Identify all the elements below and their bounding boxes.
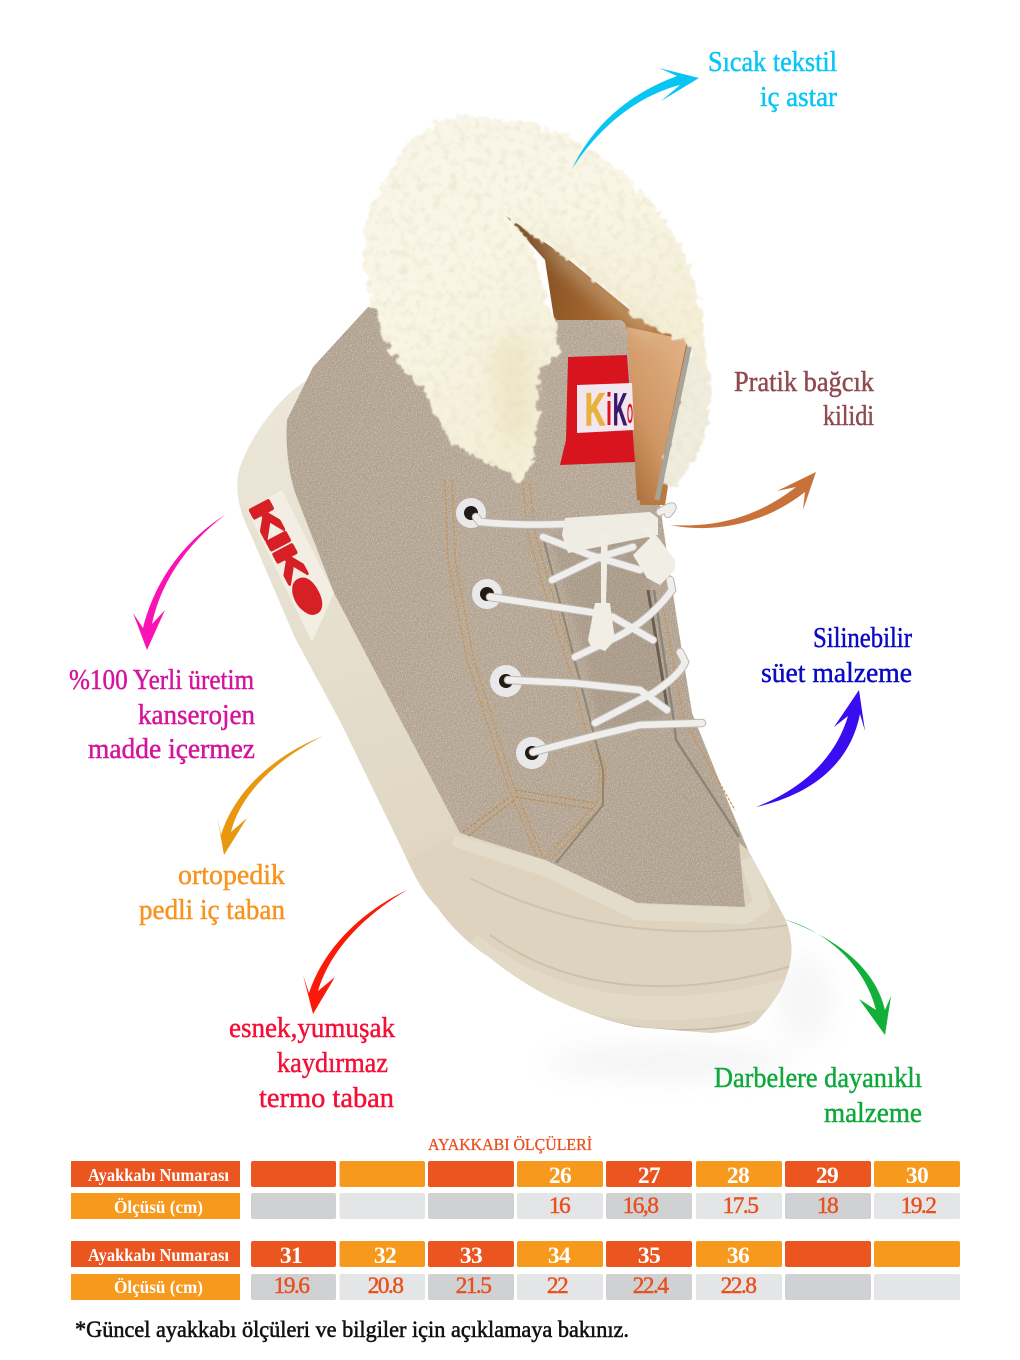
table size cells row 1: 30 [906,1163,928,1189]
table size cells row 2 [251,1241,960,1269]
inner tongue gusset shade [550,530,668,735]
table row labels [71,1161,240,1300]
bungee lace lock [562,512,658,553]
table measure cells row 1: 18 [817,1193,838,1219]
shoe illustration [237,115,795,1033]
rubber toe cap [408,835,791,1033]
table row labels: Ölçüsü (cm) [114,1197,203,1218]
callout: local production [69,515,255,765]
table measure cells row 1 [251,1193,960,1219]
label: warm lining [708,47,838,113]
table measure cells row 2: 21.5 [456,1273,491,1299]
label logo text: i [606,384,612,435]
callout: lace lock [670,367,874,528]
label: local production [69,665,255,765]
arrow: magenta [133,515,225,650]
table size cells row 2: 33 [460,1243,482,1269]
label: orthopedic insole [139,860,285,926]
label: flexible sole: kaydırmaz [277,1048,388,1079]
table measure cells row 1: 17.5 [723,1193,758,1219]
table measure cells row 2: 20.8 [368,1273,403,1299]
label: lace lock: Pratik bağcık [734,367,874,398]
table measure cells row 2 [251,1273,960,1300]
label: lace lock [734,367,874,432]
outsole [237,380,791,1033]
eyelets [456,498,548,769]
label: local production: madde içermez [88,734,255,765]
table size cells row 2: 35 [638,1243,660,1269]
table measure cells row 1: 19.2 [901,1193,936,1219]
table size cells row 1: 27 [638,1163,661,1189]
shoe reflection on floor [545,955,833,1078]
label: orthopedic insole: pedli iç taban [139,895,285,926]
label: orthopedic insole: ortopedik [178,860,285,891]
label: flexible sole [229,1013,395,1114]
laces [456,498,702,769]
peach lining [627,327,687,503]
table measure cells row 2: 19.6 [274,1273,310,1299]
red tongue label [560,355,635,465]
label: suede: Silinebilir [813,623,913,654]
size table [71,1161,960,1300]
label logo text: K [613,384,627,435]
table size cells row 1: 26 [549,1163,572,1189]
label: impact resistant: Darbelere dayanıklı [714,1063,922,1094]
arrow: blue [756,690,865,807]
table size cells row 2: 36 [727,1243,750,1269]
heel logo slab [247,490,334,642]
fur shading [490,215,660,445]
label: local production: kanserojen [138,700,255,731]
table measure cells row 2: 22 [547,1273,568,1299]
label: impact resistant [714,1063,922,1129]
size table title: AYAKKABI ÖLÇÜLERİ [428,1135,592,1154]
lace strands [476,506,702,752]
table size cells row 1 [251,1161,960,1189]
lace strand outlines [476,506,702,752]
label logo text: K [585,384,605,435]
table size cells row 1: 29 [816,1163,838,1189]
table size cells row 2: 32 [374,1243,396,1269]
boot cavity [505,215,692,505]
table measure cells row 2: 22.4 [633,1273,669,1299]
lock pull [588,533,615,651]
table size cells row 2: 34 [548,1243,571,1269]
table row labels: Ölçüsü (cm) [114,1277,203,1298]
label: flexible sole: termo taban [259,1083,394,1114]
tongue [535,320,645,530]
arrow: cyan [572,68,699,169]
shoe illustration: O [627,398,633,429]
label: warm lining: iç astar [760,82,838,113]
callout: orthopedic insole [139,736,323,926]
suede upper [287,307,748,907]
arrow: brown [670,472,816,528]
table row labels: Ayakkabı Numarası [88,1165,229,1185]
label: warm lining: Sıcak tekstil [708,47,837,78]
label: flexible sole: esnek,yumuşak [229,1013,395,1044]
heel logo round O fill [286,574,326,618]
label white patch [577,383,634,433]
arrow: green [783,919,891,1035]
fur back band [405,115,706,380]
callout: suede [756,623,913,807]
label: suede [761,623,913,689]
grey edge strip [657,343,690,500]
arrow: red [303,890,407,1014]
toe cap bands [454,838,795,1030]
table measure cells row 1: 16,8 [623,1193,658,1219]
label logo text [586,392,633,426]
stitching and seams [445,480,739,863]
table measure cells row 2: 22.8 [721,1273,756,1299]
table size cells row 2: 31 [280,1243,302,1269]
callout: impact resistant [714,919,922,1129]
label: lace lock: kilidi [823,401,874,432]
heel logo text: KIKO [243,496,331,622]
fur turned-down collar [363,137,562,483]
callout: warm lining [572,47,838,169]
label: impact resistant: malzeme [824,1098,922,1129]
table size cells row 1: 28 [727,1163,749,1189]
footnote: *Güncel ayakkabı ölçüleri ve bilgiler için açıklamaya bakınız. [75,1317,629,1342]
label: local production: %100 Yerli üretim [69,665,254,696]
callout: flexible sole [229,890,407,1114]
lock plug [633,526,675,585]
right inner fur strip [660,338,714,487]
table row labels: Ayakkabı Numarası [88,1245,229,1265]
label: suede: süet malzeme [761,658,912,689]
table measure cells row 1: 16 [549,1193,571,1219]
arrow: orange [217,736,323,855]
